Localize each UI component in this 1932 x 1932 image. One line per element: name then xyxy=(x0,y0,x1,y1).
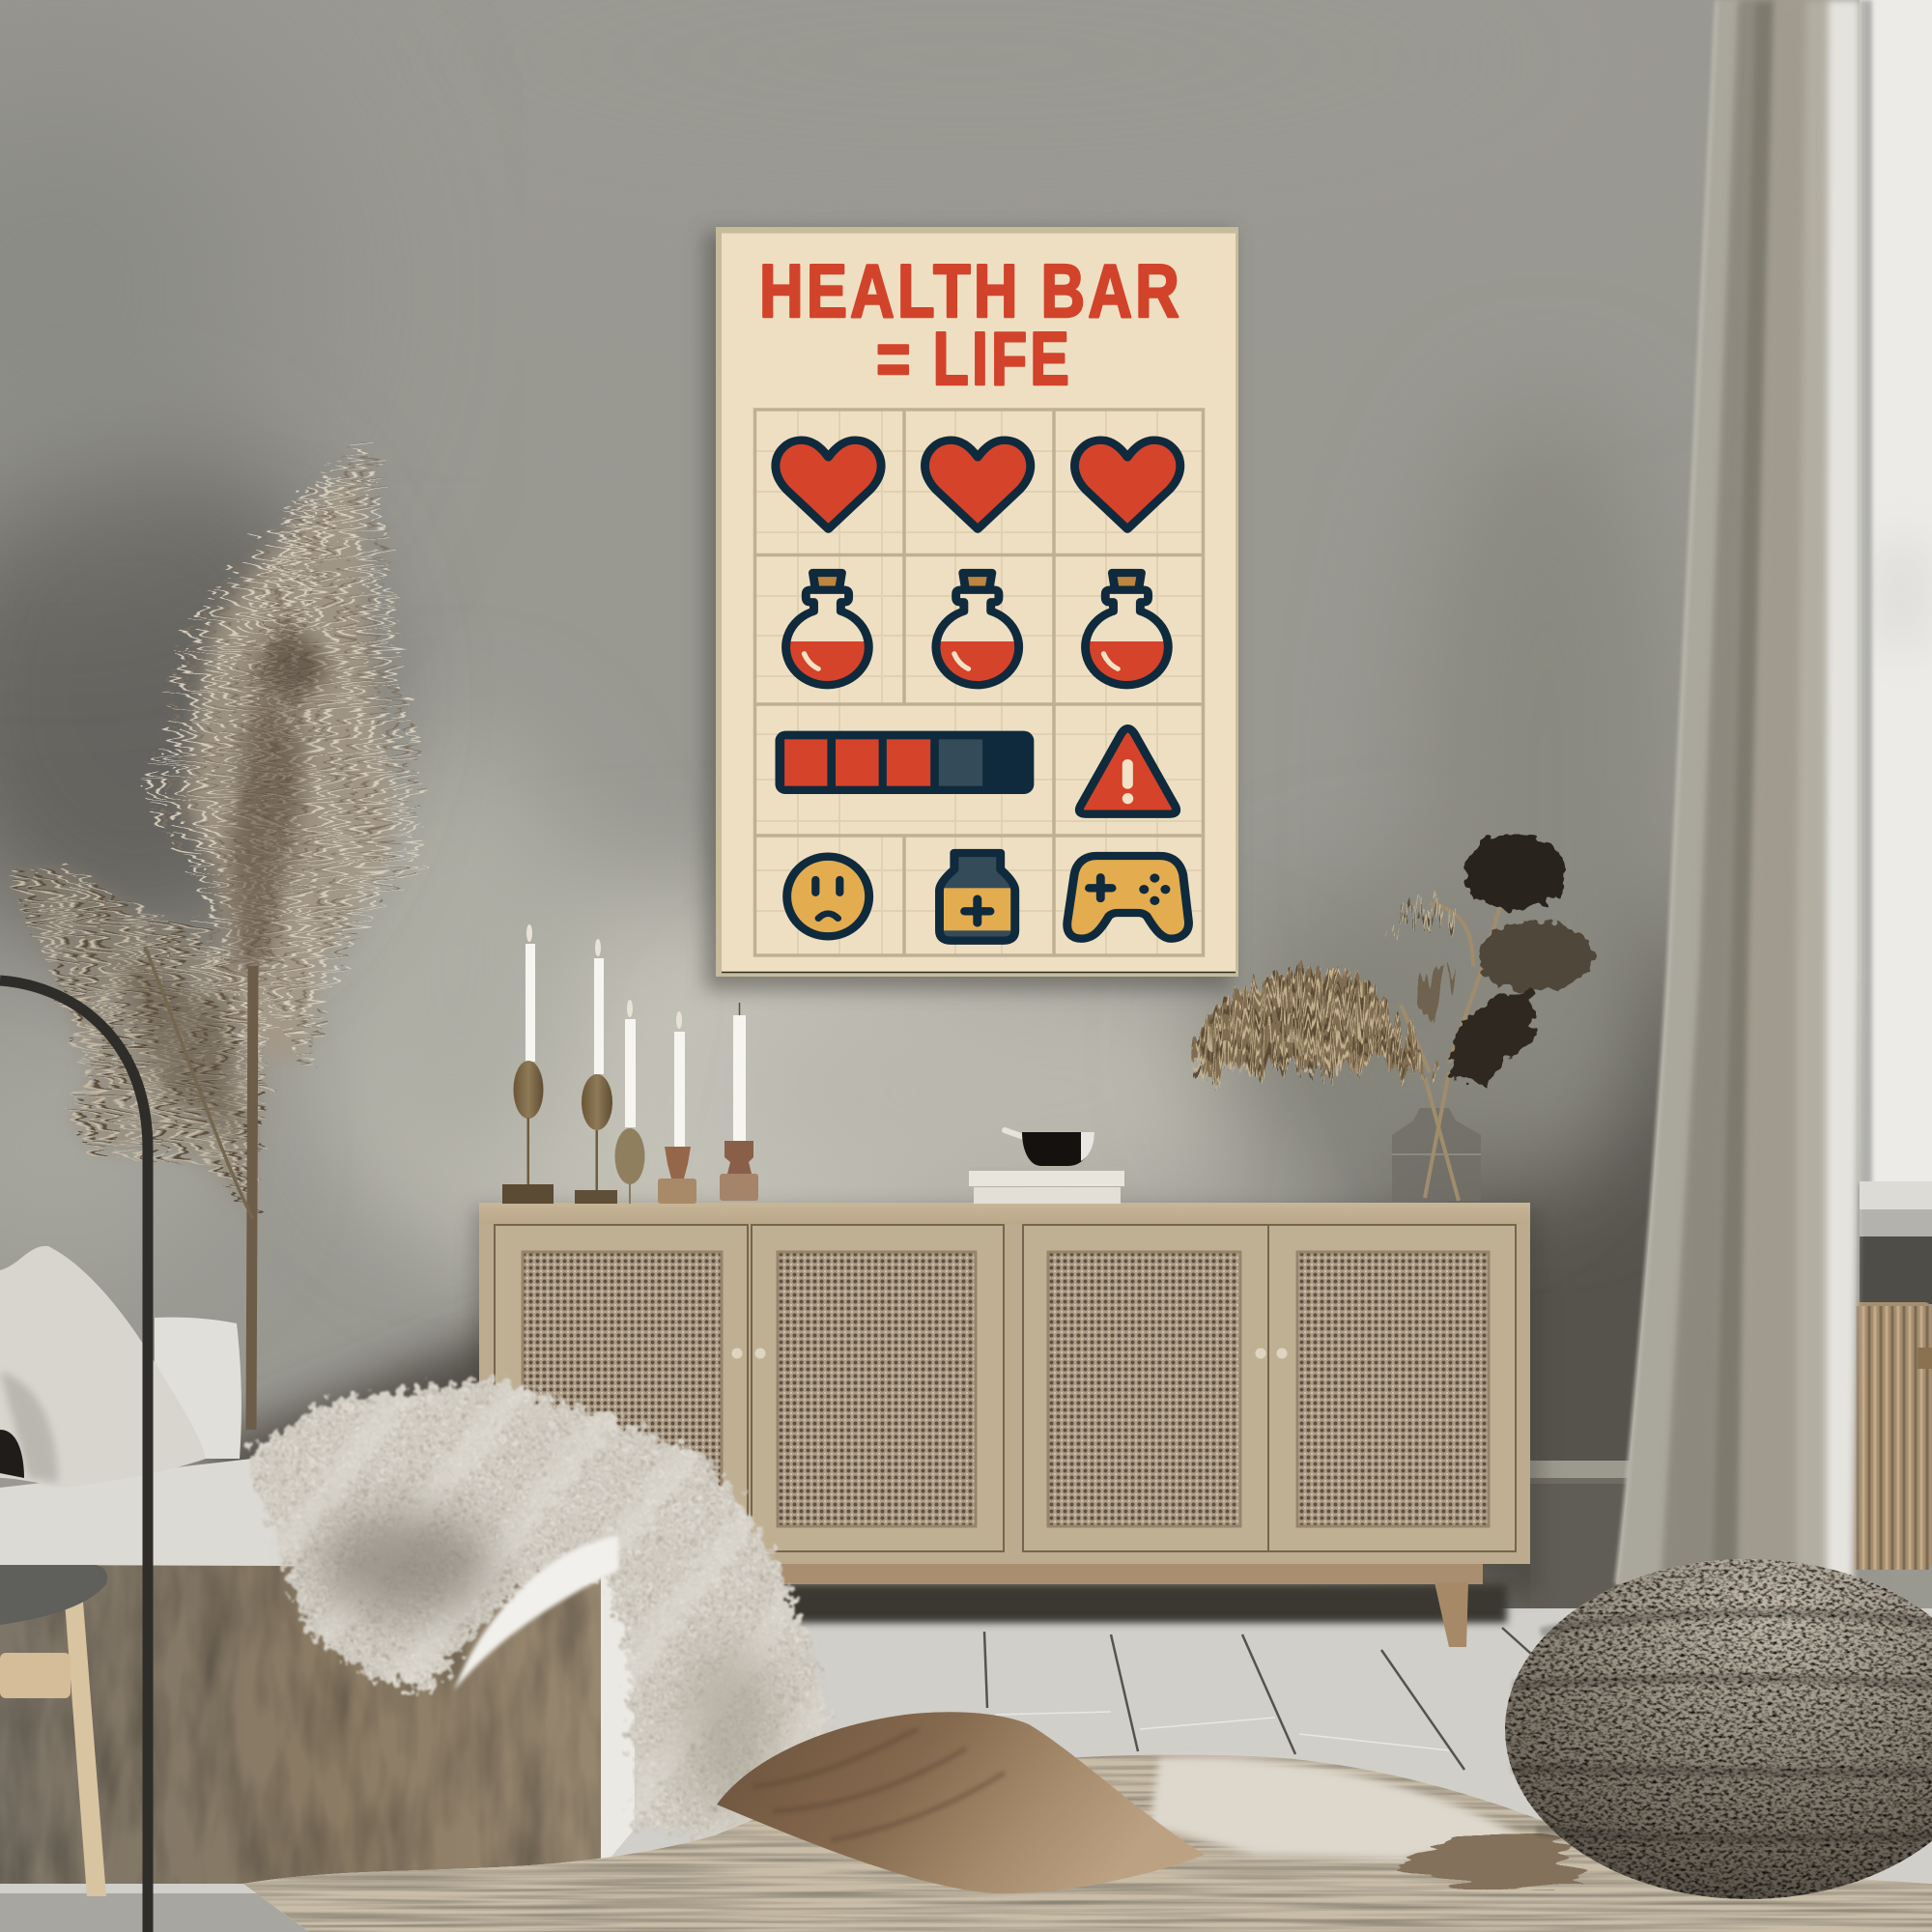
sofa xyxy=(0,1246,635,1884)
main plume right strands xyxy=(253,435,420,1070)
fur throw xyxy=(246,1378,840,1840)
cabinet top xyxy=(479,1203,1530,1224)
fur mass xyxy=(246,1378,840,1840)
curtain xyxy=(1616,0,1860,1584)
stems xyxy=(1401,898,1502,1201)
spoon xyxy=(1005,1130,1024,1137)
bowl xyxy=(1022,1132,1094,1166)
sofa mattress xyxy=(0,1459,618,1567)
candle 1 xyxy=(502,924,554,1204)
icon: potion 3 xyxy=(1086,573,1168,685)
knitted pouf xyxy=(1505,1559,1932,1899)
title xyxy=(759,248,1182,401)
rug cream band xyxy=(1150,1757,1521,1860)
fur strands xyxy=(246,1378,840,1840)
cane panel 4 xyxy=(1297,1252,1489,1526)
health bar xyxy=(775,731,1034,794)
main plume left strands xyxy=(145,464,333,1067)
plume shadow core xyxy=(232,696,304,976)
poster xyxy=(716,227,1238,977)
sofa white side xyxy=(601,1550,635,1869)
rug xyxy=(243,1754,1932,1932)
door 2 xyxy=(752,1225,1004,1551)
door 3 xyxy=(1023,1225,1268,1551)
books and bowl xyxy=(969,1130,1124,1204)
back cushion xyxy=(155,1318,242,1459)
icons row 3 and 4 xyxy=(775,728,1188,941)
small light plume xyxy=(1386,900,1449,942)
candle 2 xyxy=(575,939,617,1204)
lower book xyxy=(974,1187,1121,1204)
pampas grass tall xyxy=(8,435,420,1430)
cane panel 1 xyxy=(523,1252,722,1526)
poster frame xyxy=(716,227,1238,977)
dark plume upper xyxy=(1478,922,1594,991)
icon: potion 2 xyxy=(936,573,1019,685)
title: HEALTH BAR xyxy=(759,248,1182,333)
candle 4 xyxy=(658,1011,696,1204)
door 1 xyxy=(495,1225,748,1551)
dark seed head xyxy=(1464,833,1565,910)
icons row 1 and 2 xyxy=(776,440,1180,685)
candle 3 xyxy=(614,1000,645,1204)
door knobs xyxy=(732,1349,1287,1358)
cane panel 2 xyxy=(778,1252,976,1526)
pouf ribs xyxy=(1512,1613,1932,1838)
small mid plume xyxy=(1413,964,1454,1014)
cabinet leg xyxy=(1435,1582,1468,1647)
left plume shade xyxy=(116,956,242,1140)
floor tiles xyxy=(0,1584,1932,1932)
stalk xyxy=(251,966,253,1430)
icon: warning triangle xyxy=(1079,728,1177,814)
icon: medicine jar xyxy=(939,853,1015,941)
door 4 xyxy=(1268,1225,1516,1551)
left plume body xyxy=(10,869,261,1208)
sideboard shadow on wall xyxy=(473,1208,1541,1594)
main plume body xyxy=(184,464,396,1063)
grid xyxy=(755,410,1204,955)
poster paper xyxy=(722,234,1236,972)
sofa base xyxy=(0,1564,601,1884)
cabinet body xyxy=(479,1203,1530,1564)
icon: heart 3 xyxy=(1074,440,1180,529)
baseboard xyxy=(1530,1461,1636,1610)
table rail xyxy=(0,1653,71,1698)
white lock of fur xyxy=(454,1536,618,1690)
left plume strands xyxy=(8,865,266,1212)
wall xyxy=(0,29,1860,1608)
icon: sad face xyxy=(787,857,869,936)
table top xyxy=(0,1565,107,1625)
side table xyxy=(0,1565,107,1896)
fur shadow xyxy=(319,1512,493,1618)
window with sill xyxy=(1857,0,1932,1304)
radiator xyxy=(1848,1302,1932,1570)
front cushion xyxy=(0,1246,206,1488)
large left plume xyxy=(1196,969,1430,1087)
icon: potion 1 xyxy=(786,573,868,685)
icon: heart 1 xyxy=(776,440,881,529)
sideboard xyxy=(473,1203,1541,1647)
dark plume lower xyxy=(1449,990,1536,1087)
candle 5 xyxy=(720,1003,758,1201)
candles xyxy=(502,924,758,1204)
vase with dried plants xyxy=(1196,833,1594,1201)
floor lamp xyxy=(0,980,148,1932)
icon: heart 2 xyxy=(924,440,1031,529)
branch stalk xyxy=(145,947,253,1219)
upper book xyxy=(969,1167,1124,1186)
poster shadow xyxy=(705,232,1232,990)
cane panel 3 xyxy=(1048,1252,1240,1526)
fur tail on rug xyxy=(1397,1833,1584,1884)
pouf body xyxy=(1505,1559,1932,1899)
table legs xyxy=(65,1602,106,1896)
title: = LIFE xyxy=(876,316,1072,401)
vase xyxy=(1392,1108,1481,1201)
cabinet plinth xyxy=(768,1564,1483,1584)
floor cushion xyxy=(717,1712,1205,1893)
icon: game controller xyxy=(1067,856,1188,939)
